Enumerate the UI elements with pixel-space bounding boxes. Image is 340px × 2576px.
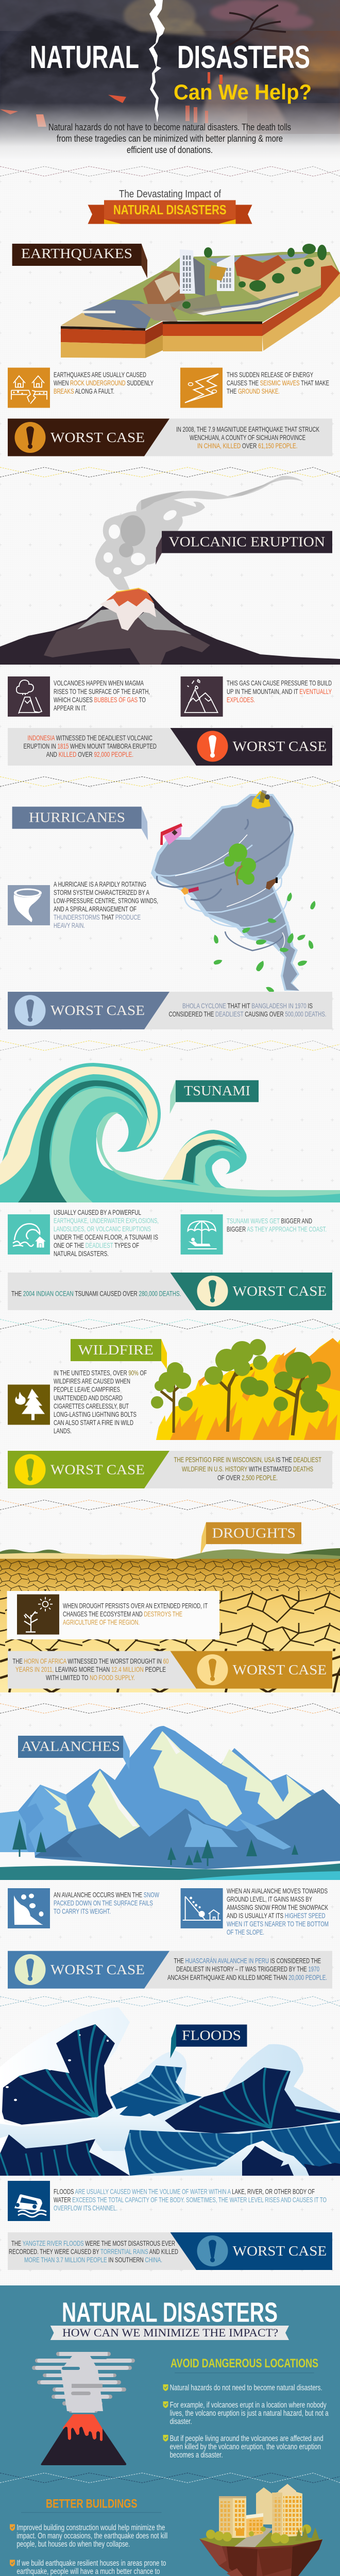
icon: car in flood water bbox=[8, 2181, 50, 2221]
text block: EARTHQUAKES ARE USUALLY CAUSED bbox=[54, 370, 146, 379]
heading: volcanic eruption: VOLCANIC ERUPTION bbox=[169, 534, 325, 550]
ribbon: how can we minimize: HOW CAN WE MINIMIZE THE IMPACT? bbox=[62, 2326, 278, 2339]
text block bbox=[227, 370, 329, 395]
text block: AGRICULTURE OF THE REGION. bbox=[63, 1618, 140, 1626]
worst case: tsunami bbox=[8, 1273, 332, 1310]
text block: LONG-LASTING LIGHTNING BOLTS bbox=[54, 1410, 137, 1418]
worst case: earthquakes bbox=[8, 418, 332, 456]
text block: CIGARETTES CARELESSLY, BUT bbox=[54, 1402, 129, 1410]
illustration: waves bbox=[0, 1063, 340, 1202]
worst case: floods bbox=[8, 2232, 332, 2270]
worst case: droughts: WITH LIMITED TO NO FOOD SUPPLY. bbox=[46, 1673, 135, 1682]
panel: earthquakes bbox=[8, 244, 340, 456]
illustration: burning forest bbox=[151, 1338, 340, 1440]
heading: earthquakes bbox=[12, 244, 147, 278]
text block: UNDER THE OCEAN FLOOR, A TSUNAMI IS bbox=[54, 1233, 158, 1241]
text block: UNATTENDED AND DISCARD bbox=[54, 1394, 123, 1402]
text block: CAN ALSO START A FIRE IN WILD bbox=[54, 1418, 133, 1427]
worst case: volcano: WORST CASE bbox=[233, 739, 327, 754]
worst case: wildfire: OF OVER 2,500 PEOPLE. bbox=[217, 1473, 278, 1482]
bullet list: becomes a disaster. bbox=[170, 2451, 223, 2460]
worst case: hurricanes: WORST CASE bbox=[50, 1003, 145, 1018]
worst case: tsunami: WORST CASE bbox=[233, 1283, 327, 1299]
text block: EXPLODES. bbox=[227, 696, 255, 704]
intro text: from these tragedies can be minimized with better planning & more bbox=[57, 133, 283, 144]
bullet list: earthquake, people will have a much better chance to bbox=[16, 2567, 160, 2576]
heading: hurricanes: HURRICANES bbox=[29, 810, 125, 825]
icon: snow boulders slope bbox=[8, 1888, 50, 1928]
icon: tornado bbox=[8, 885, 50, 925]
worst case: floods: THE YANGTZE RIVER FLOODS WERE THE MOST DISASTROUS EVER bbox=[11, 2239, 175, 2247]
worst case: volcano: ERUPTION IN 1815 WHEN MOUNT TAMBORA ERUPTED bbox=[24, 742, 157, 750]
text block: THUNDERSTORMS THAT PRODUCE bbox=[54, 913, 141, 921]
icon: cloud over volcano bbox=[8, 676, 50, 717]
illustration: flood waves bbox=[0, 2007, 340, 2176]
bullet list bbox=[163, 2384, 329, 2460]
text block bbox=[54, 370, 154, 395]
text block bbox=[54, 880, 158, 929]
text block bbox=[54, 1208, 159, 1258]
icon: burning tree bbox=[8, 1385, 50, 1425]
worst case: earthquakes: IN CHINA, KILLED OVER 61,150 PEOPLE. bbox=[197, 442, 298, 450]
worst case: avalanches: THE HUASCARÁN AVALANCHE IN PERU IS CONSIDERED THE bbox=[174, 1957, 321, 1965]
worst case: volcano bbox=[8, 728, 332, 766]
text block: THE GROUND SHAKE. bbox=[227, 387, 280, 395]
cause 2: pressure bbox=[181, 676, 332, 717]
illustration: tornado bbox=[151, 790, 317, 994]
worst case: wildfire: THE PESHTIGO FIRE IN WISCONSIN, USA IS THE DEADLIEST bbox=[174, 1455, 321, 1464]
worst case: wildfire: WILDFIRE IN U.S. HISTORY WITH ESTIMATED DEATHS bbox=[182, 1465, 313, 1473]
worst case: volcano: INDONESIA WITNESSED THE DEADLIEST VOLCANIC bbox=[28, 734, 152, 742]
bullet list: people, but houses do when they collapse. bbox=[16, 2540, 130, 2549]
cause: rotating storm bbox=[8, 880, 158, 929]
text block: LOW-PRESSURE CENTRE, STRONG WINDS, bbox=[54, 896, 158, 905]
text block: WILDFIRES ARE CAUSED WHEN bbox=[54, 1377, 130, 1385]
cause 2: gains mass bbox=[181, 1887, 329, 1936]
text block: TSUNAMI WAVES GET BIGGER AND bbox=[227, 1217, 312, 1225]
heading: droughts: DROUGHTS bbox=[212, 1526, 296, 1541]
text block: AND IS USUALLY AT ITS HIGHEST SPEED bbox=[227, 1911, 326, 1920]
text block bbox=[54, 2188, 327, 2212]
text block bbox=[227, 1887, 329, 1936]
cause 1: rock underground bbox=[8, 368, 154, 408]
text block: ONE OF THE DEADLIEST TYPES OF bbox=[54, 1241, 139, 1249]
text block: VOLCANOES HAPPEN WHEN MAGMA bbox=[54, 679, 144, 687]
heading: avalanches: AVALANCHES bbox=[21, 1739, 120, 1754]
heading: wildfire bbox=[71, 1339, 167, 1369]
illustration: smoke plume bbox=[95, 476, 303, 590]
heading: tsunami: TSUNAMI bbox=[184, 1083, 250, 1098]
panel: droughts bbox=[0, 1522, 340, 1692]
text block: LANDSLIDES, OR VOLCANIC ERUPTIONS bbox=[54, 1225, 151, 1233]
illustration: earthquake cross-section bbox=[61, 244, 340, 358]
text block: EARTHQUAKE, UNDERWATER EXPLOSIONS, bbox=[54, 1216, 159, 1225]
text block: APPEAR IN IT. bbox=[54, 704, 87, 712]
worst case: wildfire bbox=[8, 1451, 332, 1488]
panel: floods bbox=[0, 2007, 340, 2270]
text block: AN AVALANCHE OCCURS WHEN THE SNOW bbox=[54, 1891, 160, 1899]
cause: ecosystem change bbox=[7, 1591, 219, 1639]
worst case: avalanches: ANCASH EARTHQUAKE AND KILLED MORE THAN 20,000 PEOPLE. bbox=[167, 1973, 327, 1981]
text block: PACKED DOWN ON THE SURFACE FAILS bbox=[54, 1899, 153, 1907]
tree silhouette bbox=[210, 0, 313, 46]
bullet list bbox=[10, 2523, 167, 2576]
text block: HEAVY RAIN. bbox=[54, 921, 85, 929]
worst case: floods: MORE THAN 3.7 MILLION PEOPLE IN SOUTHERN CHINA. bbox=[24, 2256, 162, 2264]
text block: WHEN DROUGHT PERSISTS OVER AN EXTENDED PERIOD, IT bbox=[63, 1601, 208, 1609]
heading: earthquakes: EARTHQUAKES bbox=[21, 246, 132, 261]
text block: NATURAL DISASTERS. bbox=[54, 1249, 109, 1258]
panel: how can we minimize the impact bbox=[0, 2285, 340, 2576]
heading: droughts bbox=[200, 1522, 301, 1555]
heading: the devastating impact: The Devastating Impact of bbox=[119, 189, 221, 200]
icon: seismic lightning bbox=[180, 368, 223, 408]
heading: floods: FLOODS bbox=[182, 2027, 241, 2043]
panel: tsunami bbox=[0, 1063, 340, 1310]
icon: lightning bolt bbox=[149, 0, 165, 123]
bullet list: Improved building construction would help minimize the bbox=[16, 2523, 165, 2532]
tornado debris bbox=[160, 790, 278, 895]
worst case: tsunami: THE 2004 INDIAN OCEAN TSUNAMI CAUSED OVER 280,000 DEATHS. bbox=[11, 1290, 181, 1298]
cause 1: magma bbox=[8, 676, 150, 717]
cause: campfires and cigarettes bbox=[8, 1369, 147, 1435]
text block bbox=[63, 1601, 208, 1626]
text block: WHEN ROCK UNDERGROUND SUDDENLY bbox=[54, 379, 154, 387]
heading: floods bbox=[170, 2025, 247, 2058]
icon: sun and bare tree bbox=[17, 1595, 59, 1635]
icon: wave over house bbox=[8, 1214, 50, 1255]
text block bbox=[54, 1369, 147, 1435]
panel: volcanic eruption bbox=[0, 476, 340, 766]
text block bbox=[54, 1891, 160, 1916]
cause: overflow bbox=[8, 2181, 327, 2221]
icon: cracked ground houses bbox=[8, 368, 50, 408]
worst case: droughts: YEARS IN 2011, LEAVING MORE THAN 12.4 MILLION PEOPLE bbox=[15, 1665, 166, 1673]
worst case: hurricanes bbox=[8, 992, 332, 1029]
illustration: volcano bbox=[0, 588, 340, 665]
cause 1: earthquake origin bbox=[8, 1208, 159, 1258]
illustration: snowy mountains bbox=[0, 1726, 340, 1880]
title: NATURAL bbox=[30, 40, 139, 75]
illustration: cracked ground bbox=[0, 1548, 340, 1692]
cause 2: seismic waves bbox=[180, 368, 329, 408]
heading: the devastating impact bbox=[88, 189, 252, 224]
heading: hurricanes bbox=[12, 807, 148, 840]
ribbon: natural disasters: NATURAL DISASTERS bbox=[113, 202, 227, 217]
text block: A HURRICANE IS A RAPIDLY ROTATING bbox=[54, 880, 146, 888]
text block bbox=[54, 679, 150, 712]
ribbon: natural disasters bbox=[88, 200, 252, 224]
worst case: avalanches: WORST CASE bbox=[50, 1962, 145, 1977]
bullet list: impact. On many occasions, the earthquake does not kill bbox=[16, 2532, 167, 2540]
title bbox=[30, 40, 310, 75]
heading: volcanic eruption bbox=[156, 531, 332, 565]
cause 2: waves grow bbox=[181, 1214, 327, 1255]
icon: beach umbrella bbox=[181, 1214, 223, 1255]
cause 1: snow fails bbox=[8, 1888, 160, 1928]
text block: AND A SPIRAL ARRANGEMENT OF bbox=[54, 905, 137, 913]
bullet list: disaster. bbox=[170, 2417, 192, 2426]
heading: tsunami bbox=[170, 1080, 259, 1114]
bullet list: If we build earthquake resilient houses in areas prone to bbox=[16, 2559, 166, 2568]
intro text bbox=[48, 122, 291, 155]
worst case: droughts: THE HORN OF AFRICA WITNESSED THE WORST DROUGHT IN 60 bbox=[12, 1657, 169, 1665]
text block: LANDS. bbox=[54, 1427, 72, 1435]
text block: STORM SYSTEM CHARACTERIZED BY A bbox=[54, 888, 149, 896]
text block: BREAKS ALONG A FAULT. bbox=[54, 387, 114, 395]
section: avoid dangerous locations bbox=[32, 2352, 329, 2465]
heading: avalanches bbox=[18, 1736, 130, 1770]
text block: PEOPLE LEAVE CAMPFIRES bbox=[54, 1385, 120, 1394]
heading: better buildings: BETTER BUILDINGS bbox=[46, 2497, 137, 2511]
text block: WHICH CAUSES BUBBLES OF GAS TO bbox=[54, 696, 146, 704]
text block bbox=[227, 679, 332, 704]
panel: wildfire bbox=[8, 1338, 340, 1488]
subtitle: Can We Help? bbox=[174, 80, 312, 104]
worst case: avalanches bbox=[8, 1951, 332, 1989]
worst case: hurricanes: CONSIDERED THE DEADLIEST CAUSING OVER 500,000 DEATHS. bbox=[169, 1010, 327, 1018]
text block: OF THE SLOPE. bbox=[227, 1928, 264, 1936]
worst case: droughts: WORST CASE bbox=[233, 1662, 327, 1677]
panel: avalanches bbox=[0, 1726, 340, 1989]
worst case: wildfire: WORST CASE bbox=[50, 1462, 145, 1477]
text block: RISES TO THE SURFACE OF THE EARTH, bbox=[54, 687, 150, 696]
worst case: earthquakes: WORST CASE bbox=[50, 430, 145, 445]
worst case: droughts bbox=[8, 1651, 332, 1689]
worst case: floods: RECORDED. THEY WERE CAUSED BY TORRENTIAL RAINS AND KILLED bbox=[9, 2247, 178, 2256]
hero background scene bbox=[0, 0, 340, 161]
worst case: floods: WORST CASE bbox=[233, 2243, 327, 2259]
text block bbox=[227, 1217, 327, 1233]
illustration: floating island buildings bbox=[199, 2484, 322, 2576]
illustration: volcano with smoke bbox=[32, 2352, 135, 2465]
worst case: volcano: AND KILLED OVER 92,000 PEOPLE. bbox=[46, 750, 133, 758]
intro text: efficient use of donations. bbox=[127, 144, 213, 155]
text block: CHANGES THE ECOSYSTEM AND DESTROYS THE bbox=[63, 1609, 182, 1618]
panel: hero header bbox=[0, 0, 340, 161]
icon: exploding mountain bbox=[181, 676, 223, 717]
heading: wildfire: WILDFIRE bbox=[78, 1342, 154, 1358]
section: better buildings bbox=[10, 2484, 322, 2576]
text block: OVERFLOW ITS CHANNEL. bbox=[54, 2204, 117, 2212]
text block: TO CARRY ITS WEIGHT. bbox=[54, 1907, 111, 1916]
text block: IN THE UNITED STATES, OVER 90% OF bbox=[54, 1369, 147, 1377]
text block: USUALLY CAUSED BY A POWERFUL bbox=[54, 1208, 141, 1216]
panel: hurricanes bbox=[8, 790, 332, 1029]
icon: avalanche approaching house bbox=[181, 1888, 223, 1928]
worst case: hurricanes: BHOLA CYCLONE THAT HIT BANGLADESH IN 1970 IS bbox=[182, 1002, 313, 1010]
text block: CAUSES THE SEISMIC WAVES THAT MAKE bbox=[227, 379, 329, 387]
